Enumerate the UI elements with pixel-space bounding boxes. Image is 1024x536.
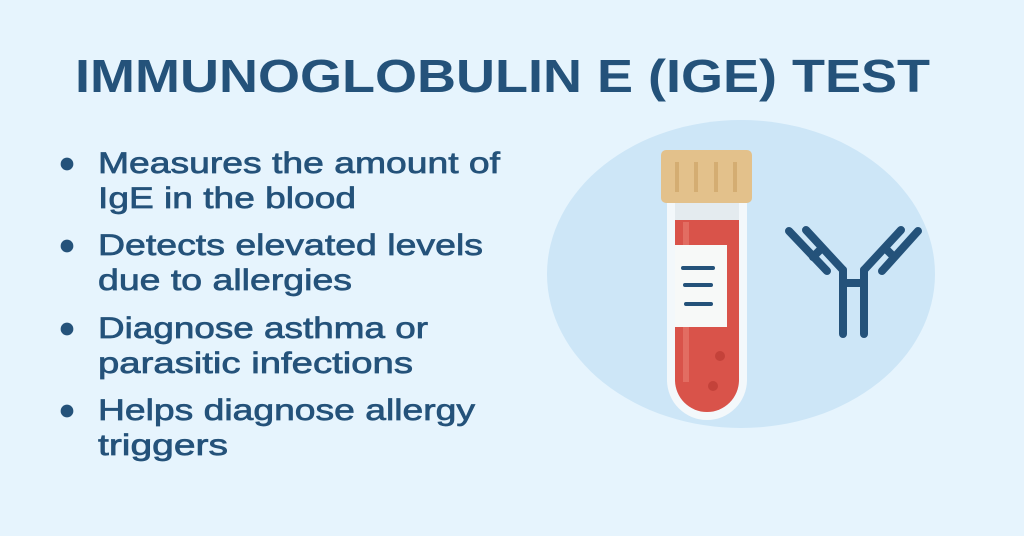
bullet 3: Diagnose asthma or bbox=[98, 312, 428, 345]
illustration circle bbox=[547, 120, 935, 428]
bullet 1: IgE in the blood bbox=[98, 182, 356, 215]
bullet 2: due to allergies bbox=[98, 264, 352, 297]
bullet 4: triggers bbox=[98, 429, 228, 462]
bullet 1 bbox=[61, 147, 501, 215]
bullet 2: Detects elevated levels bbox=[98, 229, 483, 262]
bullet 3: parasitic infections bbox=[98, 347, 413, 380]
bullet list bbox=[61, 147, 501, 462]
title: IMMUNOGLOBULIN E (IGE) TEST bbox=[75, 50, 930, 102]
bullet 1: Measures the amount of bbox=[98, 147, 501, 180]
bullet 3 bbox=[61, 312, 428, 380]
icon: blood test tube bbox=[661, 150, 752, 420]
bullet 2 bbox=[61, 229, 483, 297]
bullet 4: Helps diagnose allergy bbox=[98, 394, 475, 427]
bullet 4 bbox=[61, 394, 475, 462]
icon: antibody bbox=[789, 230, 918, 334]
